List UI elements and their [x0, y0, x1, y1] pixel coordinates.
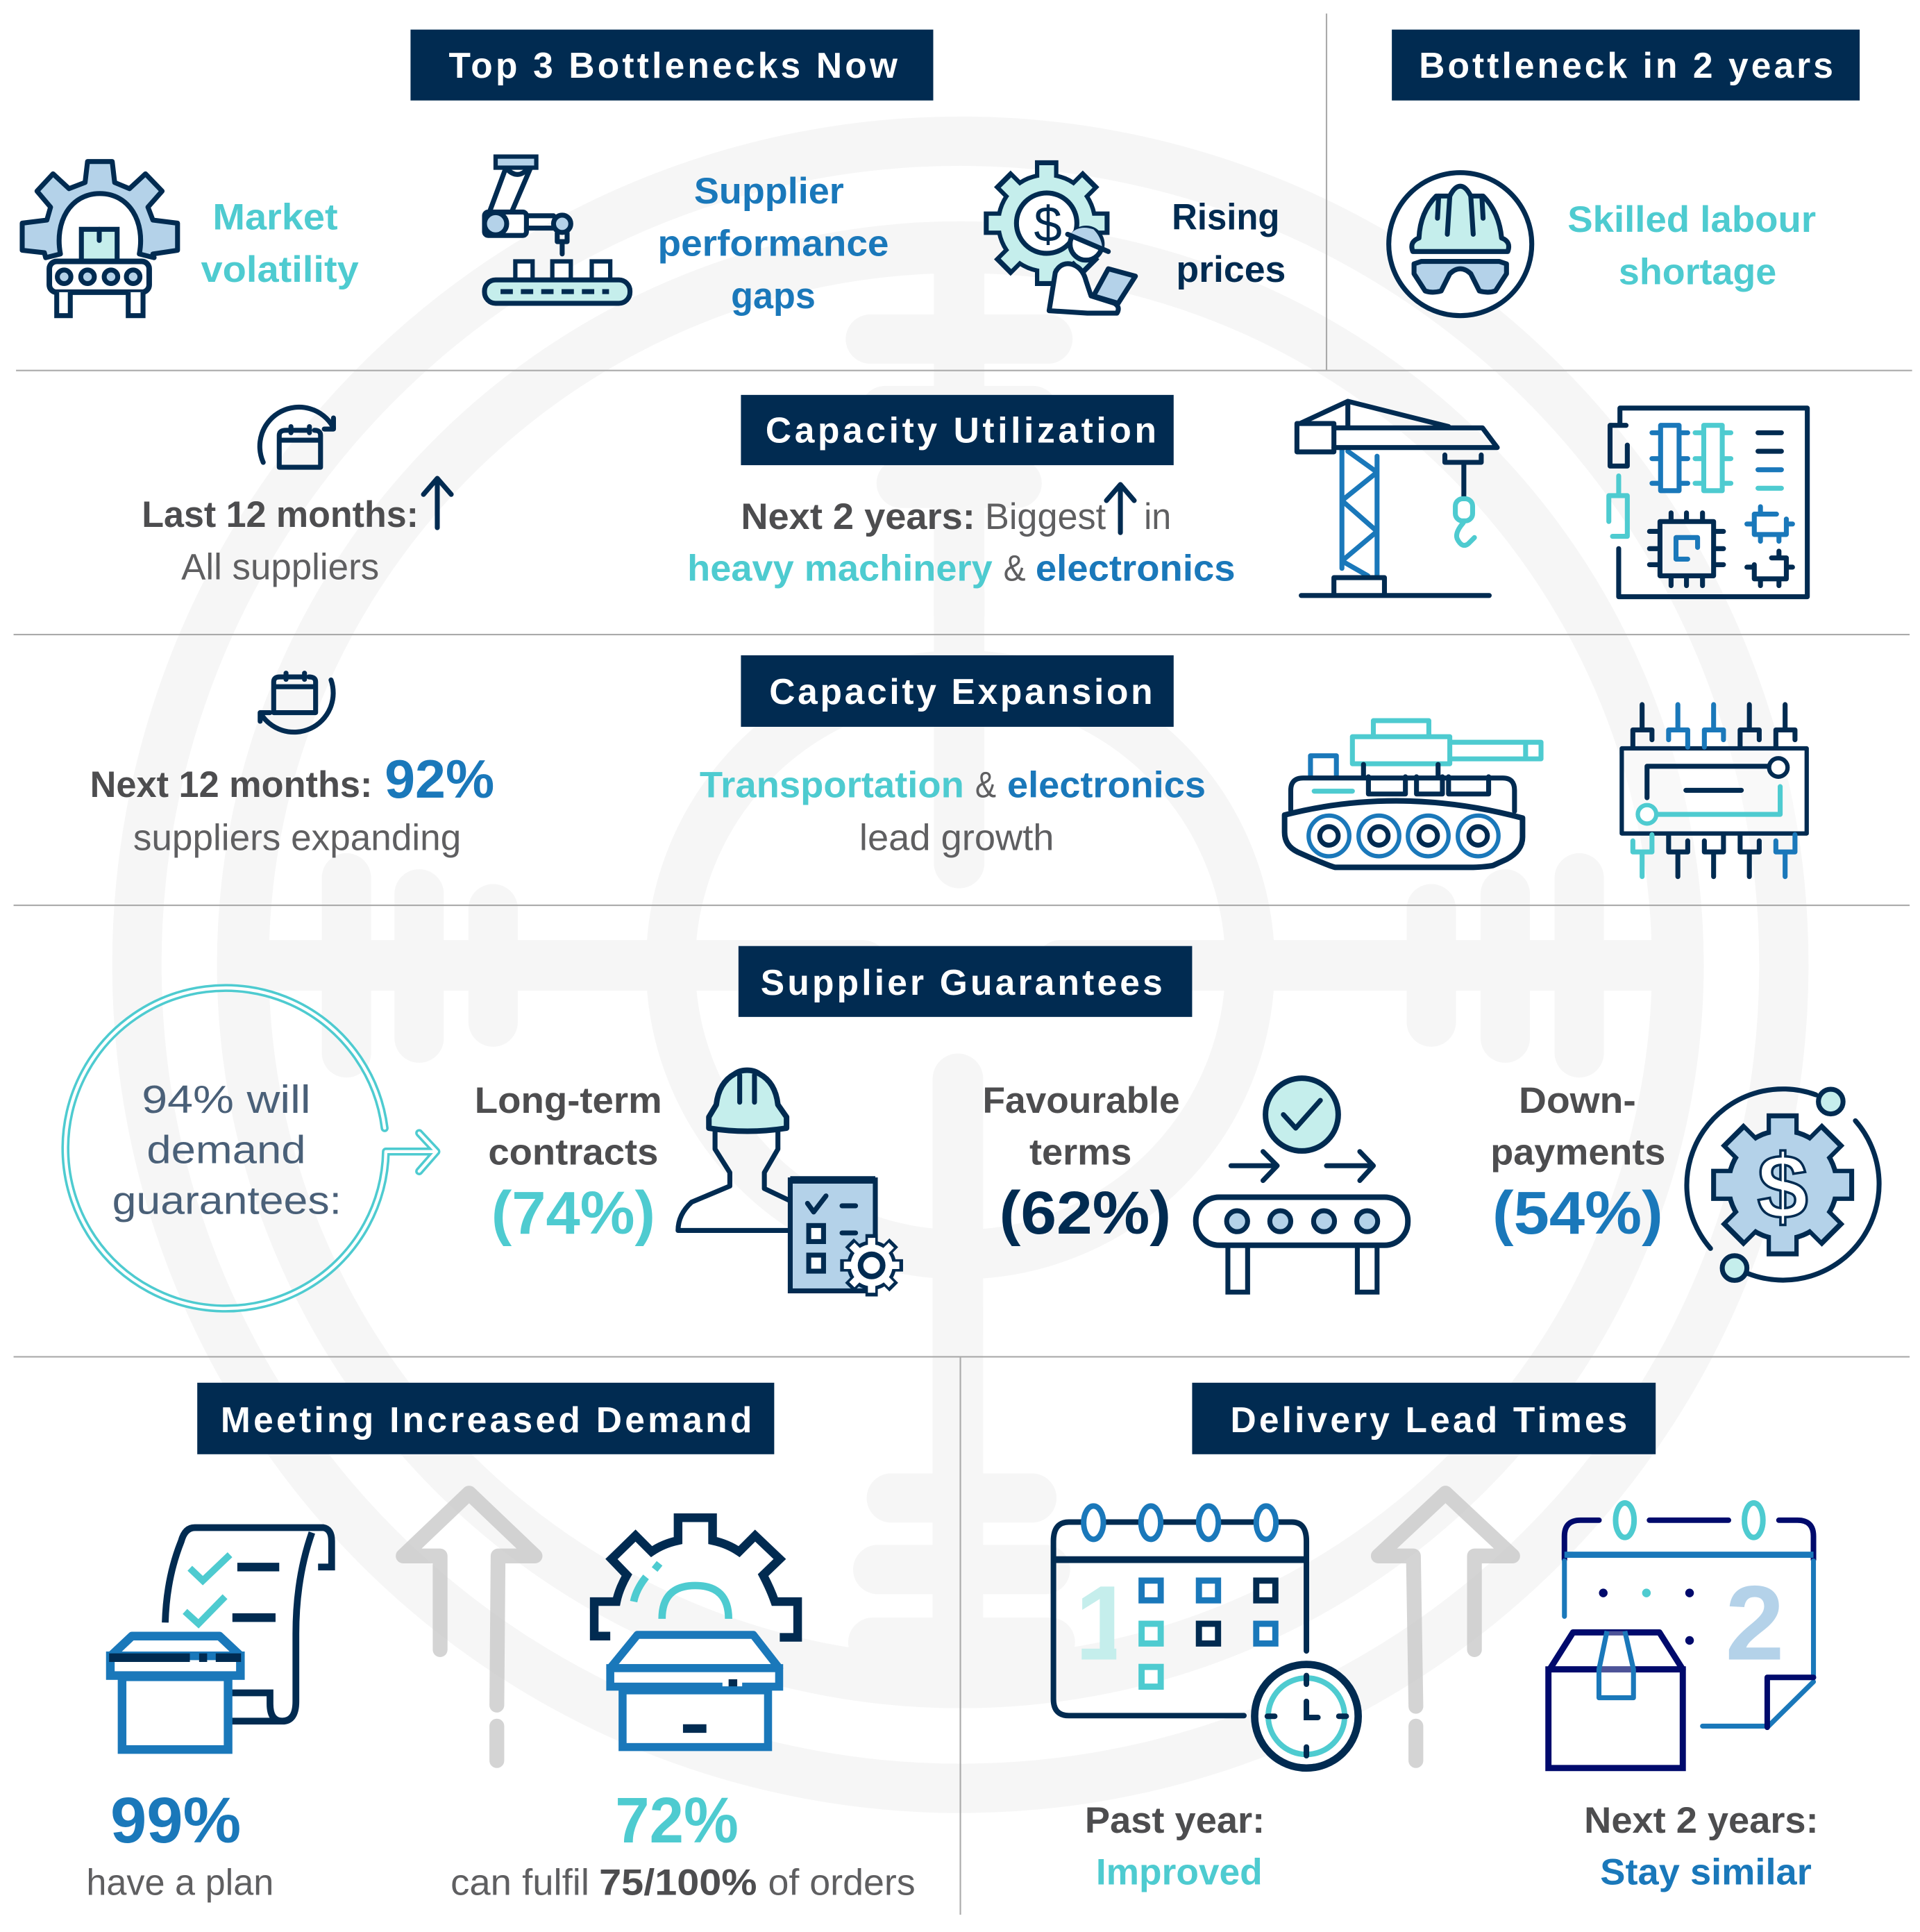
heading: Bottleneck in 2 years: Bottleneck in 2 years: [1419, 45, 1833, 85]
callout: 94% will demand guarantees circle and arrow: guarantees:: [112, 1179, 342, 1223]
panel: top 3 bottlenecks now: [22, 30, 1286, 317]
icon: electronic chip: [1622, 705, 1807, 877]
text: favourable terms 62%: (62%): [999, 1179, 1171, 1247]
icon: tank: [1285, 721, 1541, 867]
icon: robot arm and conveyor: [485, 157, 630, 303]
icon: gear with conveyor: [22, 162, 178, 316]
label: Rising prices: prices: [1176, 249, 1286, 290]
text: past year improved: Improved: [1096, 1852, 1263, 1893]
callout: 94% will demand guarantees circle and arrow: 94% will: [142, 1078, 311, 1122]
label: Supplier performance gaps: Supplier: [694, 171, 844, 212]
text: past year improved: Past year:: [1085, 1800, 1265, 1841]
stat: 72% can fulfil 75/100% of orders: of orders: [768, 1863, 916, 1904]
text: next 12 months 92 percent: 92%: [385, 748, 494, 809]
text: next 2 years biggest increase: [687, 485, 1236, 589]
stat: 99% have a plan: 99%: [110, 1784, 241, 1856]
heading: Bottleneck in 2 years: [1392, 30, 1860, 101]
callout: 94% will demand guarantees circle and arrow: [65, 988, 437, 1309]
icon: checklist scroll and box: [109, 1527, 332, 1749]
callout: 94% will demand guarantees circle and arrow: demand: [146, 1129, 305, 1173]
panel: supplier guarantees: [65, 946, 1879, 1309]
icon: dollar gear with orbit: $: [1758, 1136, 1808, 1238]
label: Supplier performance gaps: [658, 171, 889, 317]
text: next 2 years stay similar: Stay similar: [1600, 1852, 1812, 1893]
arrow: up gray demand: [403, 1493, 535, 1761]
text: down-payments 54%: [1490, 1080, 1665, 1247]
label: Rising prices: [1172, 196, 1286, 290]
text: long-term contracts 74%: [475, 1080, 662, 1247]
text: transportation and electronics lead growth: [700, 765, 1206, 859]
arrow: up gray delivery: [1379, 1493, 1513, 1761]
icon: calendar with clock: 1: [1075, 1565, 1134, 1683]
icon: worker with checklist and gear: [678, 1070, 903, 1296]
heading: Delivery Lead Times: [1192, 1383, 1656, 1454]
text: next 2 years biggest increase: heavy machinery: [687, 548, 993, 589]
text: favourable terms 62%: Favourable: [983, 1080, 1180, 1121]
text: long-term contracts 74%: Long-term: [475, 1080, 662, 1121]
text: transportation and electronics lead growth: electronics: [1007, 765, 1206, 806]
stat: 99% have a plan: have a plan: [86, 1863, 273, 1904]
text: favourable terms 62%: [983, 1080, 1180, 1247]
text: last 12 months all suppliers: Last 12 months:: [142, 494, 419, 535]
stat: 99% have a plan: [86, 1784, 273, 1904]
panel: delivery lead times: [1054, 1383, 1819, 1893]
icon: gear over open box: [594, 1518, 798, 1747]
text: long-term contracts 74%: contracts: [488, 1132, 658, 1173]
label: Market volatility: volatility: [201, 249, 359, 290]
icon: calendar with package: [1549, 1503, 1814, 1768]
icon: hard hat and goggles in circle: [1389, 173, 1532, 316]
stat: 72% can fulfil 75/100% of orders: [450, 1784, 916, 1904]
text: next 12 months 92 percent: Next 12 months:: [90, 764, 372, 805]
text: transportation and electronics lead growth: Transportation: [700, 765, 964, 806]
text: last 12 months all suppliers: All suppliers: [181, 547, 379, 588]
icon: conveyor with check mark: [1196, 1078, 1408, 1292]
label: Supplier performance gaps: gaps: [731, 276, 816, 317]
text: next 2 years stay similar: Next 2 years:: [1584, 1800, 1819, 1841]
label: Market volatility: Market: [212, 196, 338, 237]
heading: Supplier Guarantees: Supplier Guarantees: [761, 962, 1163, 1002]
heading: Capacity Expansion: Capacity Expansion: [769, 671, 1153, 712]
arrow: up biggest: [1106, 485, 1134, 532]
heading: Capacity Utilization: Capacity Utilization: [766, 410, 1156, 451]
icon: calendar with clock: [1054, 1506, 1358, 1768]
heading: Delivery Lead Times: Delivery Lead Times: [1230, 1400, 1627, 1440]
heading: Capacity Expansion: [741, 655, 1174, 727]
arrow: up: [423, 478, 451, 528]
panel: capacity expansion: [90, 655, 1807, 877]
stat: 72% can fulfil 75/100% of orders: can fulfil: [450, 1863, 589, 1904]
text: transportation and electronics lead growth: &: [975, 765, 996, 806]
icon: gear with dollar sign and analyst: [984, 160, 1136, 313]
icon: tower crane: [1297, 401, 1497, 596]
icon: calendar with package: 2: [1726, 1565, 1784, 1683]
text: next 12 months 92 percent: [90, 748, 494, 859]
icon: calendar with forward arrow: [260, 407, 333, 467]
icon: dollar gear with orbit: [1687, 1089, 1879, 1280]
icon: calendar with backward arrow: [260, 673, 333, 732]
text: past year improved: [1085, 1800, 1265, 1893]
label: Market volatility: [201, 196, 359, 290]
text: next 2 years biggest increase: Next 2 years:: [741, 496, 975, 537]
text: next 2 years biggest increase: Biggest: [985, 496, 1106, 537]
watermark: target crosshair background: [137, 141, 1784, 1788]
heading: Top 3 Bottlenecks Now: [410, 30, 933, 101]
heading: Capacity Utilization: [741, 395, 1174, 465]
text: down-payments 54%: (54%): [1492, 1179, 1663, 1247]
text: next 2 years biggest increase: electronics: [1036, 548, 1236, 589]
heading: Meeting Increased Demand: [197, 1383, 774, 1454]
text: last 12 months all suppliers: [142, 478, 451, 588]
text: down-payments 54%: payments: [1490, 1132, 1665, 1173]
panel: capacity utilization: [142, 395, 1808, 597]
panel: bottleneck in 2 years: [1389, 30, 1860, 316]
text: next 2 years stay similar: [1584, 1800, 1819, 1893]
stat: 72% can fulfil 75/100% of orders: 75/100%: [599, 1863, 757, 1904]
heading: Top 3 Bottlenecks Now: Top 3 Bottlenecks Now: [448, 45, 898, 85]
stat: 72% can fulfil 75/100% of orders: 72%: [615, 1784, 739, 1856]
text: transportation and electronics lead growth: lead growth: [859, 818, 1054, 859]
icon: gear with dollar sign and analyst: $: [1034, 196, 1062, 253]
label: Skilled labour shortage: [1567, 199, 1816, 292]
label: Supplier performance gaps: performance: [658, 224, 889, 264]
text: long-term contracts 74%: (74%): [491, 1179, 655, 1247]
text: down-payments 54%: Down-: [1519, 1080, 1636, 1121]
text: next 12 months 92 percent: suppliers expanding: [133, 818, 461, 859]
label: Skilled labour shortage: Skilled labour: [1567, 199, 1816, 240]
icon: circuit board: [1609, 408, 1808, 597]
heading: Supplier Guarantees: [739, 946, 1192, 1017]
label: Skilled labour shortage: shortage: [1619, 251, 1776, 292]
text: next 2 years biggest increase: in: [1144, 496, 1171, 537]
label: Rising prices: Rising: [1172, 196, 1280, 237]
heading: Meeting Increased Demand: Meeting Increased Demand: [221, 1400, 752, 1440]
text: next 2 years biggest increase: &: [1004, 548, 1026, 589]
panel: meeting increased demand: [86, 1383, 916, 1904]
text: favourable terms 62%: terms: [1029, 1132, 1131, 1173]
